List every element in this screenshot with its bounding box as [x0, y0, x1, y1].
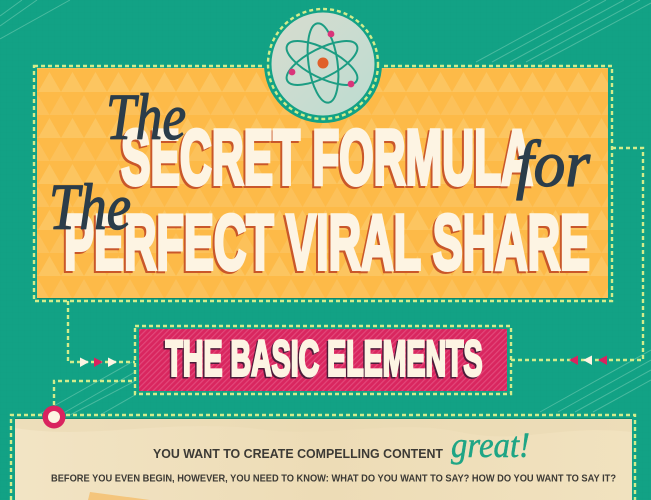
text: before you begin: BEFORE YOU EVEN BEGIN, HOWEVER, YOU NEED TO KNOW: WHAT DO YOU WANT TO SAY? HOW DO YOU WANT TO SAY IT?	[51, 474, 616, 484]
script word: The (first): The	[106, 81, 186, 154]
script word: for: for	[516, 128, 590, 201]
arrows: left connector	[80, 358, 117, 367]
panel: title banner	[34, 66, 612, 301]
arrows: right connector	[569, 356, 607, 365]
panel: content paper	[11, 415, 635, 500]
icon: atom badge	[264, 5, 382, 123]
heading: the basic elements	[164, 330, 482, 388]
connector dashes	[54, 148, 643, 405]
icon: ring connector node	[42, 406, 66, 428]
script word: great!: great!	[451, 425, 530, 465]
text: compelling content: YOU WANT TO CREATE COMPELLING CONTENT	[153, 446, 443, 461]
script word: The (second): The	[49, 171, 131, 244]
panel: the basic elements banner	[135, 326, 511, 394]
orange shape at crop edge	[88, 492, 150, 500]
